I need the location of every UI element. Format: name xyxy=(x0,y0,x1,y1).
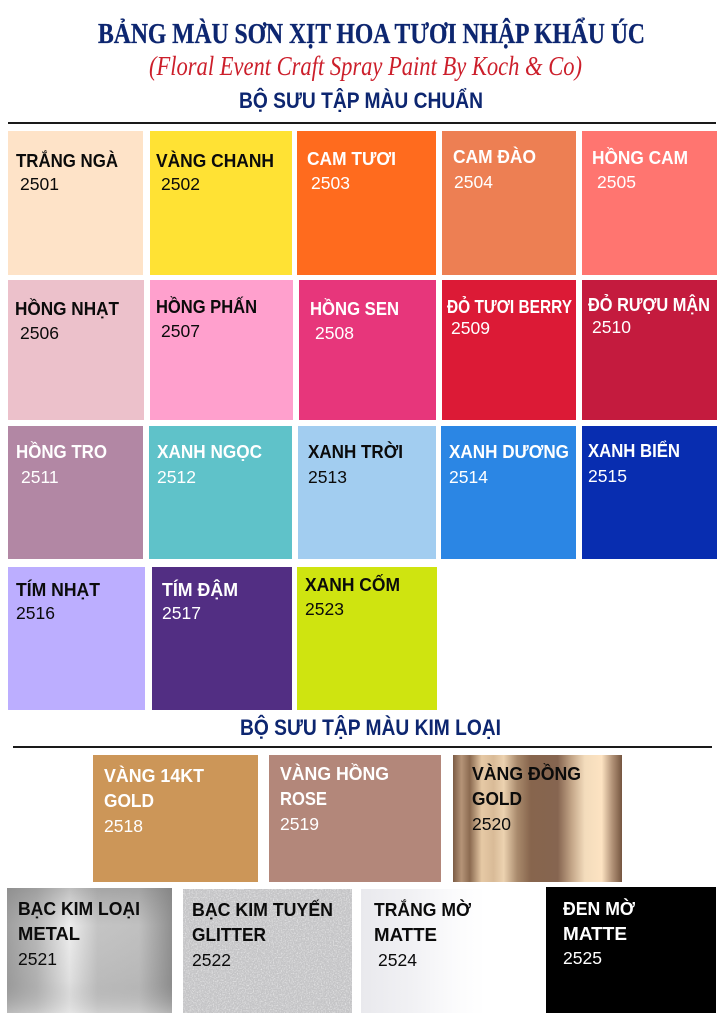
swatch 2515 xyxy=(582,426,717,559)
swatch 2516: TÍM NHẠT xyxy=(16,579,101,600)
swatch 2516: 2516 xyxy=(16,603,55,623)
swatch 2522: GLITTER xyxy=(192,924,266,945)
swatch 2514: XANH DƯƠNG xyxy=(449,441,569,462)
swatch 2525: ĐEN MỜ xyxy=(563,898,635,919)
subtitle: (Floral Event Craft Spray Paint By Koch & Co) xyxy=(149,51,582,81)
swatch 2505: HỒNG CAM xyxy=(592,147,688,168)
swatch 2518: GOLD xyxy=(104,790,154,811)
swatch 2508 xyxy=(299,280,436,420)
swatch 2511: HỒNG TRO xyxy=(16,441,107,462)
swatch 2518 xyxy=(93,755,258,882)
swatch 2511: 2511 xyxy=(21,467,59,487)
swatch 2524: MATTE xyxy=(374,924,437,945)
swatch 2504: CAM ĐÀO xyxy=(453,146,536,167)
swatch 2501: TRẮNG NGÀ xyxy=(16,150,118,171)
swatch 2506: 2506 xyxy=(20,323,59,343)
swatch 2508: HỒNG SEN xyxy=(310,298,399,319)
swatch 2510: 2510 xyxy=(592,317,631,337)
swatch 2519: ROSE xyxy=(280,788,327,809)
swatch 2522 xyxy=(183,889,352,1013)
swatch 2502: VÀNG CHANH xyxy=(156,150,274,171)
swatch 2524: 2524 xyxy=(378,950,417,970)
swatch 2510 xyxy=(582,280,717,420)
swatch 2519: VÀNG HỒNG xyxy=(280,763,389,784)
swatch 2513 xyxy=(298,426,436,559)
swatch 2506: HỒNG NHẠT xyxy=(15,298,120,319)
swatch 2507 xyxy=(150,280,293,420)
swatch 2504 xyxy=(442,131,576,275)
swatch 2525: 2525 xyxy=(563,948,602,968)
panel: standard colour swatches xyxy=(8,131,717,710)
swatch 2521: METAL xyxy=(18,923,80,944)
swatch 2514 xyxy=(441,426,576,559)
swatch 2509: ĐỎ TƯƠI BERRY xyxy=(447,296,573,317)
swatch 2501: 2501 xyxy=(20,174,59,194)
swatch 2505 xyxy=(582,131,717,275)
swatch 2516 xyxy=(8,567,145,710)
swatch 2509: 2509 xyxy=(451,318,490,338)
swatch 2524 xyxy=(361,889,485,1013)
heading: metallic colours: BỘ SƯU TẬP MÀU KIM LOẠI xyxy=(240,715,501,740)
swatch 2506 xyxy=(8,280,144,420)
swatch 2507: HỒNG PHẤN xyxy=(156,296,257,317)
swatch 2525: MATTE xyxy=(563,923,627,944)
swatch 2501 xyxy=(8,131,143,275)
swatch 2523 xyxy=(297,567,437,710)
swatch 2508: 2508 xyxy=(315,323,354,343)
swatch 2518: 2518 xyxy=(104,816,143,836)
swatch 2519: 2519 xyxy=(280,814,319,834)
swatch 2517 xyxy=(152,567,292,710)
swatch 2517: 2517 xyxy=(162,603,201,623)
swatch 2509 xyxy=(442,280,576,420)
swatch 2524: TRẮNG MỜ xyxy=(374,899,471,920)
swatch 2517: TÍM ĐẬM xyxy=(162,579,238,600)
swatch 2512: 2512 xyxy=(157,467,196,487)
swatch 2515: XANH BIỂN xyxy=(588,440,680,461)
swatch 2502 xyxy=(150,131,292,275)
swatch 2520: VÀNG ĐỒNG xyxy=(472,763,581,784)
swatch 2523: XANH CỐM xyxy=(305,574,400,595)
swatch 2525 xyxy=(546,887,716,1013)
swatch 2513: 2513 xyxy=(308,467,347,487)
swatch 2520: GOLD xyxy=(472,788,522,809)
swatch 2523: 2523 xyxy=(305,599,344,619)
swatch 2521: BẠC KIM LOẠI xyxy=(18,898,140,919)
swatch 2522: BẠC KIM TUYẾN xyxy=(192,899,333,920)
swatch 2512: XANH NGỌC xyxy=(157,441,262,462)
swatch 2503: 2503 xyxy=(311,173,350,193)
swatch 2503 xyxy=(297,131,436,275)
panel: metallic colour swatches xyxy=(7,755,716,1013)
swatch 2521: 2521 xyxy=(18,949,57,969)
swatch 2520 xyxy=(453,755,622,882)
swatch 2514: 2514 xyxy=(449,467,488,487)
swatch 2513: XANH TRỜI xyxy=(308,441,403,462)
swatch 2510: ĐỎ RƯỢU MẬN xyxy=(588,294,710,315)
heading: standard colours: BỘ SƯU TẬP MÀU CHUẨN xyxy=(239,88,483,113)
swatch 2522: 2522 xyxy=(192,950,231,970)
swatch 2512 xyxy=(149,426,292,559)
swatch 2507: 2507 xyxy=(161,321,200,341)
swatch 2502: 2502 xyxy=(161,174,200,194)
swatch 2519 xyxy=(269,755,441,882)
swatch 2504: 2504 xyxy=(454,172,493,192)
swatch 2515: 2515 xyxy=(588,466,627,486)
swatch 2511 xyxy=(8,426,143,559)
swatch 2521 xyxy=(7,888,172,1013)
swatch 2520: 2520 xyxy=(472,814,511,834)
swatch 2503: CAM TƯƠI xyxy=(307,148,396,169)
swatch 2518: VÀNG 14KT xyxy=(104,765,205,786)
swatch 2505: 2505 xyxy=(597,172,636,192)
